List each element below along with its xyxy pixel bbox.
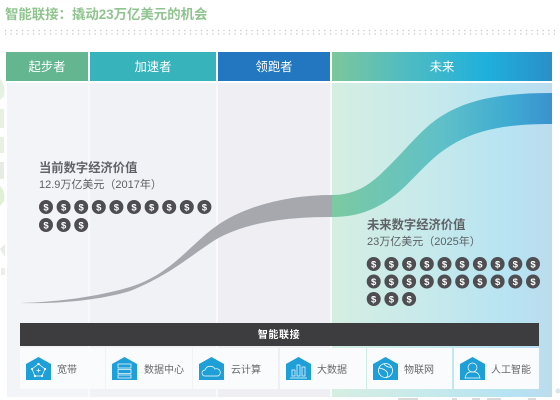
coins: 2025 value: $ bbox=[371, 260, 377, 270]
coins: 2025 value bbox=[367, 257, 540, 306]
coins: 2025 value: $ bbox=[513, 260, 519, 270]
dark bar: 智能联接 bbox=[20, 323, 539, 346]
coins: 2017 value: $ bbox=[43, 220, 49, 232]
coins: 2025 value: $ bbox=[406, 294, 412, 306]
dark bar: 智能联接: 智能联接 bbox=[258, 328, 300, 341]
coins: 2025 value: $ bbox=[460, 277, 466, 288]
cell: 物联网 bbox=[367, 348, 452, 389]
column header: 领跑者: 领跑者 bbox=[256, 60, 292, 74]
column header: 加速者 bbox=[90, 52, 216, 81]
coins: 2025 value: $ bbox=[389, 260, 395, 270]
icon: cloud bbox=[199, 357, 224, 380]
coins: 2025 value: $ bbox=[371, 294, 377, 306]
icon: data center bbox=[112, 357, 137, 380]
cell: 云计算 bbox=[193, 348, 278, 389]
coins: 2025 value: $ bbox=[513, 277, 519, 288]
column header: 起步者 bbox=[6, 52, 88, 81]
cell: 数据中心 bbox=[106, 348, 192, 389]
column backgrounds bbox=[7, 83, 552, 397]
coins: 2017 value: $ bbox=[184, 202, 190, 214]
coins: 2025 value: $ bbox=[530, 277, 536, 288]
column header: 未来 bbox=[332, 52, 552, 81]
decorative left edge shapes bbox=[0, 79, 5, 275]
decorative bottom fragments bbox=[398, 388, 560, 400]
cell: 云计算: 云计算 bbox=[231, 363, 261, 376]
cell: 宽带 bbox=[20, 348, 105, 389]
text block: future digital economy value: 未来数字经济价值 bbox=[367, 217, 465, 232]
curve: current growth (gray) bbox=[20, 195, 332, 303]
coins: 2017 value: $ bbox=[79, 220, 85, 232]
cell: 数据中心: 数据中心 bbox=[144, 363, 184, 376]
coins: 2017 value: $ bbox=[114, 202, 120, 214]
coins: 2017 value bbox=[39, 200, 211, 232]
text block: current digital economy value: 当前数字经济价值 bbox=[39, 160, 137, 175]
cell: 大数据: 大数据 bbox=[317, 363, 347, 376]
curve: future growth (gradient) bbox=[332, 93, 552, 217]
icon: artificial intelligence bbox=[460, 357, 485, 380]
coins: 2025 value: $ bbox=[477, 260, 483, 270]
text block: future digital economy value: 23万亿美元（2025年） bbox=[367, 234, 481, 248]
column header: 加速者: 加速者 bbox=[135, 60, 171, 74]
coins: 2025 value: $ bbox=[495, 260, 501, 270]
coins: 2025 value: $ bbox=[442, 277, 448, 288]
column header: 未来: 未来 bbox=[430, 60, 454, 74]
text block: current digital economy value: 12.9万亿美元（2017年） bbox=[39, 177, 162, 191]
coins: 2017 value: $ bbox=[79, 202, 85, 214]
text block: future digital economy value bbox=[367, 217, 481, 248]
coins: 2017 value: $ bbox=[202, 202, 208, 214]
coins: 2025 value: $ bbox=[442, 260, 448, 270]
coins: 2017 value: $ bbox=[131, 202, 137, 214]
text block: current digital economy value bbox=[39, 160, 162, 191]
title: 智能联接：撬动23万亿美元的机会 bbox=[5, 6, 208, 22]
icon: internet of things bbox=[373, 357, 398, 380]
column header: 起步者: 起步者 bbox=[29, 60, 65, 74]
cell: 大数据 bbox=[280, 348, 366, 389]
coins: 2025 value: $ bbox=[389, 277, 395, 288]
column header: 领跑者 bbox=[218, 52, 330, 81]
coins: 2025 value: $ bbox=[389, 294, 395, 306]
coins: 2017 value: $ bbox=[61, 220, 67, 232]
cell: 人工智能: 人工智能 bbox=[491, 363, 531, 376]
coins: 2025 value: $ bbox=[424, 260, 430, 270]
coins: 2025 value: $ bbox=[530, 260, 536, 270]
dotted divider bbox=[5, 30, 555, 34]
coins: 2025 value: $ bbox=[424, 277, 430, 288]
icon: broadband bbox=[26, 357, 51, 380]
coins: 2025 value: $ bbox=[371, 277, 377, 288]
cell: 物联网: 物联网 bbox=[404, 363, 434, 376]
coins: 2017 value: $ bbox=[61, 202, 67, 214]
cell: 宽带: 宽带 bbox=[57, 363, 77, 376]
icon: big data bars bbox=[286, 357, 311, 380]
coins: 2017 value: $ bbox=[96, 202, 102, 214]
coins: 2017 value: $ bbox=[167, 202, 173, 214]
coins: 2017 value: $ bbox=[43, 202, 49, 214]
coins: 2025 value: $ bbox=[406, 260, 412, 270]
coins: 2017 value: $ bbox=[149, 202, 155, 214]
coins: 2025 value: $ bbox=[495, 277, 501, 288]
coins: 2025 value: $ bbox=[460, 260, 466, 270]
cell: 人工智能 bbox=[454, 348, 539, 389]
coins: 2025 value: $ bbox=[477, 277, 483, 288]
coins: 2025 value: $ bbox=[406, 277, 412, 288]
